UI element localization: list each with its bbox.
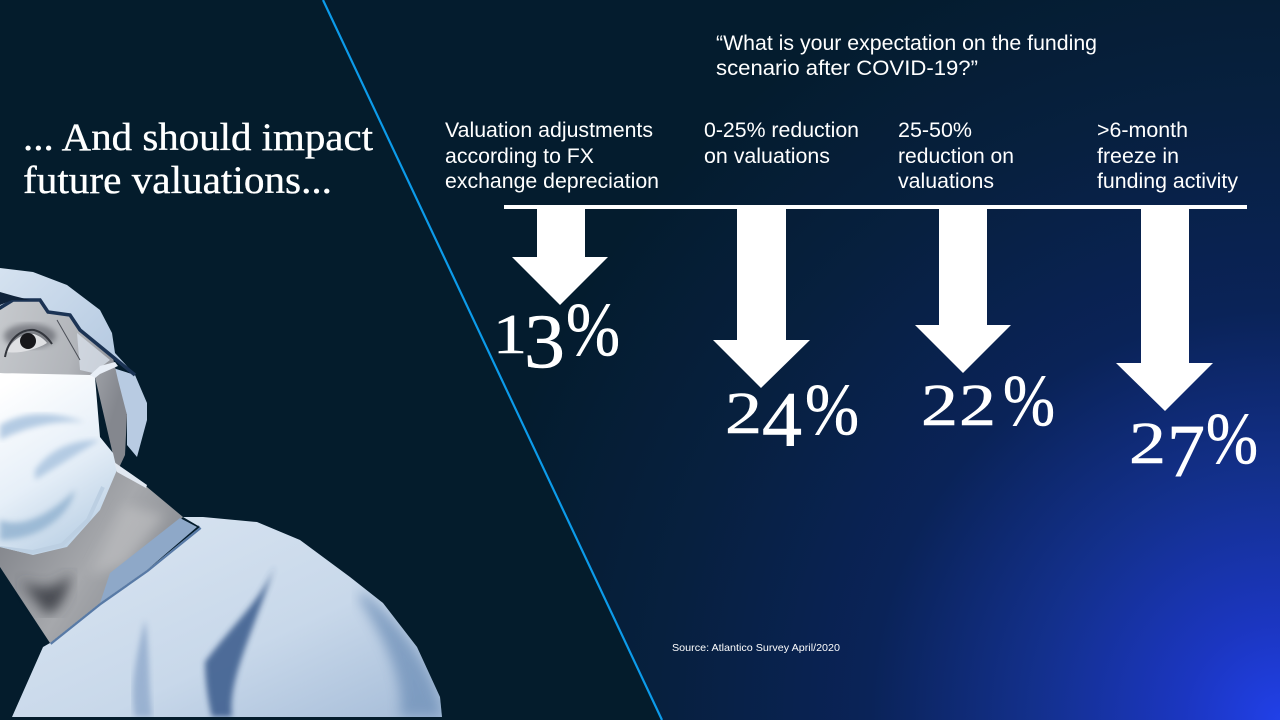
fold shadow: chest [133, 620, 152, 717]
gown [12, 517, 442, 717]
arrow: 24% [713, 207, 810, 388]
visor edge [57, 320, 80, 360]
mask stitching [0, 487, 103, 552]
goggles strap [0, 300, 135, 375]
value: 13%: 1 [493, 304, 527, 366]
diagonal divider line [323, 0, 662, 720]
survey question: scenario after COVID-19?” [716, 57, 978, 80]
label: funding freeze: freeze in [1097, 145, 1179, 168]
label: funding freeze: >6-month [1097, 119, 1188, 142]
value: 13%: % [566, 288, 620, 372]
iris [20, 333, 36, 349]
arrow: 13% [512, 207, 608, 305]
label: 25-50% reduction: reduction on [898, 145, 1014, 168]
mask pleat upper [0, 414, 85, 440]
bottom strip under illustration [0, 717, 445, 720]
jaw shadow [20, 572, 72, 613]
fold shadow: sleeve [360, 590, 442, 717]
label: 0-25% reduction: on valuations [704, 145, 830, 168]
label: FX depreciation: Valuation adjustments [445, 119, 653, 142]
label: 25-50% reduction: valuations [898, 170, 994, 193]
eyelid line [5, 330, 52, 357]
title: future valuations... [23, 158, 332, 202]
gown folds [50, 527, 442, 717]
ear shadow [124, 415, 126, 458]
mask ear strap [90, 362, 118, 378]
label: FX depreciation: exchange depreciation [445, 170, 659, 193]
value: 22%: 2 [921, 372, 958, 438]
collar trim [50, 527, 200, 643]
lower mask strap [114, 462, 147, 488]
neck [0, 465, 183, 643]
value: 27%: 2 [1129, 410, 1166, 476]
left panel [0, 0, 662, 720]
value: 27%: 7 [1167, 410, 1205, 493]
value: 13%: 3 [524, 298, 565, 384]
eye [4, 324, 56, 357]
eye white [7, 334, 47, 353]
survey question: “What is your expectation on the funding [716, 32, 1097, 55]
label: funding freeze: funding activity [1097, 170, 1238, 193]
value: 24%: 2 [725, 380, 762, 446]
title: ... And should impact [23, 115, 373, 159]
label: 25-50% reduction: 25-50% [898, 119, 972, 142]
illustration: masked medical worker [0, 268, 442, 717]
value: 22%: 2 [959, 372, 996, 438]
fold shadow: shoulder [205, 565, 275, 717]
arrow: 27% [1116, 207, 1213, 411]
value: 27%: % [1206, 398, 1258, 479]
source note: Source: Atlantico Survey April/2020 [672, 642, 840, 654]
neck highlight [90, 505, 165, 575]
value: 24%: % [805, 369, 859, 450]
label: FX depreciation: according to FX [445, 145, 594, 168]
cap [0, 268, 135, 375]
eye socket shadow [4, 324, 56, 348]
mask folds [0, 414, 103, 552]
mask [0, 373, 117, 555]
mask shadow [0, 490, 75, 540]
undershirt [100, 518, 197, 603]
face [0, 301, 127, 472]
value: 22%: % [1003, 360, 1055, 441]
goggles shadow wedge [0, 292, 30, 305]
lower cap [110, 367, 147, 457]
mask pleat lower [35, 440, 100, 480]
value: 24%: 4 [762, 376, 802, 463]
arrow: 22% [915, 207, 1011, 373]
chart baseline [504, 205, 1247, 209]
visor reflection [77, 333, 110, 373]
label: 0-25% reduction: 0-25% reduction [704, 119, 859, 142]
